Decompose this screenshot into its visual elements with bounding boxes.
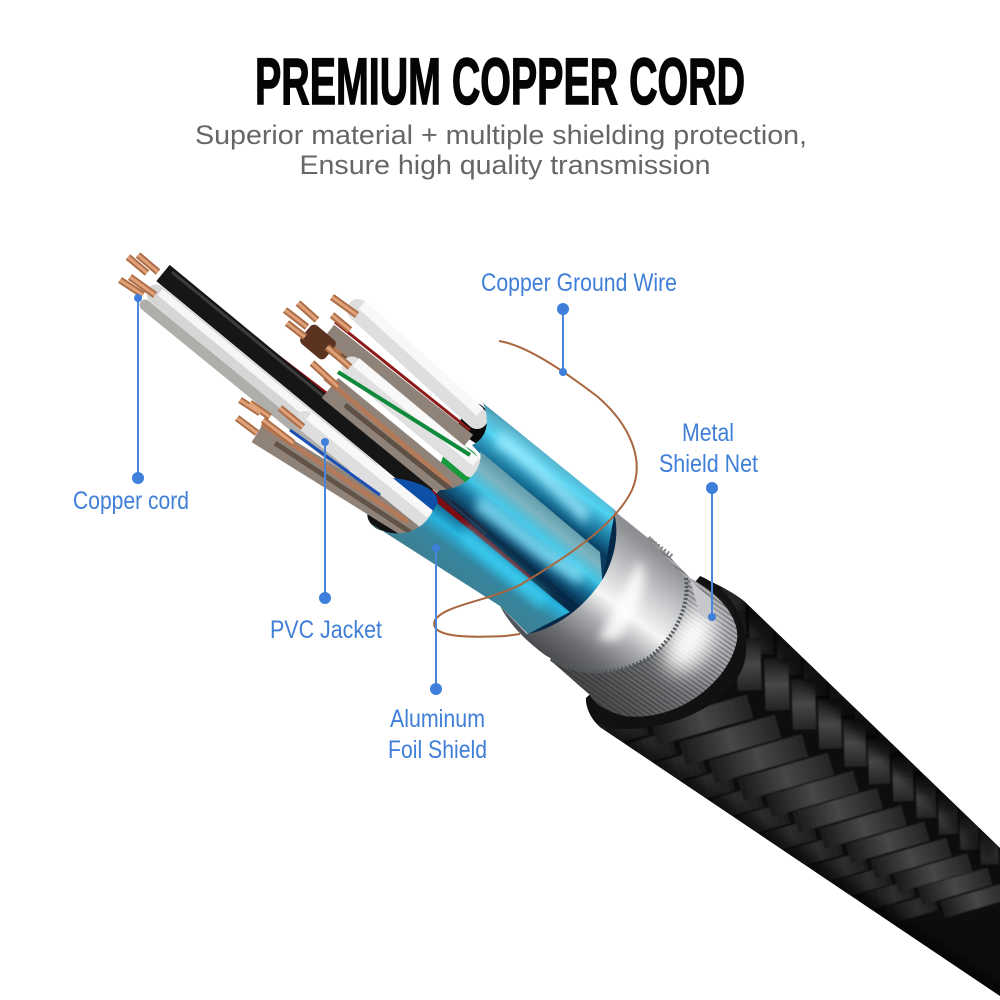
cable illustration (120, 255, 1000, 996)
tube 3 (370, 503, 570, 634)
middle wire bundle (325, 362, 481, 493)
callout: aluminum foil shield: Aluminum (390, 705, 485, 733)
callout: metal shield net: Metal (682, 419, 734, 447)
top wire bundle (298, 305, 489, 452)
tube highlights (460, 430, 590, 608)
callout: metal shield net (659, 419, 758, 621)
jacket collar (586, 576, 746, 729)
callout: metal shield net: Shield Net (659, 450, 758, 478)
tube 1 (472, 403, 615, 585)
tube 2 (440, 451, 603, 610)
callout: copper cord: Copper cord (73, 487, 189, 515)
long white wire (145, 292, 370, 470)
metal shield net (550, 536, 737, 717)
copper conductors (120, 255, 357, 443)
aluminum foil body (500, 510, 687, 673)
callout: aluminum foil shield: Foil Shield (388, 736, 487, 764)
dark rear shield opening (363, 505, 397, 535)
callout: PVC jacket (270, 438, 382, 644)
dark inside of foil opening (470, 480, 625, 634)
callout: copper cord (73, 294, 189, 515)
callout: copper ground wire: Copper Ground Wire (481, 269, 677, 297)
callout: PVC jacket: PVC Jacket (270, 616, 382, 644)
black wire (163, 272, 430, 493)
callout: aluminum foil shield (388, 544, 487, 764)
lower wire bundle (258, 416, 438, 535)
callout: copper ground wire (481, 269, 677, 376)
subtitle line 2: Ensure high quality transmission (300, 150, 710, 180)
gap shadow between tubes (425, 490, 570, 618)
red wire in gap (432, 495, 530, 580)
copper ground wire (434, 341, 637, 637)
subtitle line 1: Superior material + multiple shielding protection, (195, 120, 807, 150)
braided outer jacket (586, 582, 1000, 996)
red wire (262, 342, 530, 572)
